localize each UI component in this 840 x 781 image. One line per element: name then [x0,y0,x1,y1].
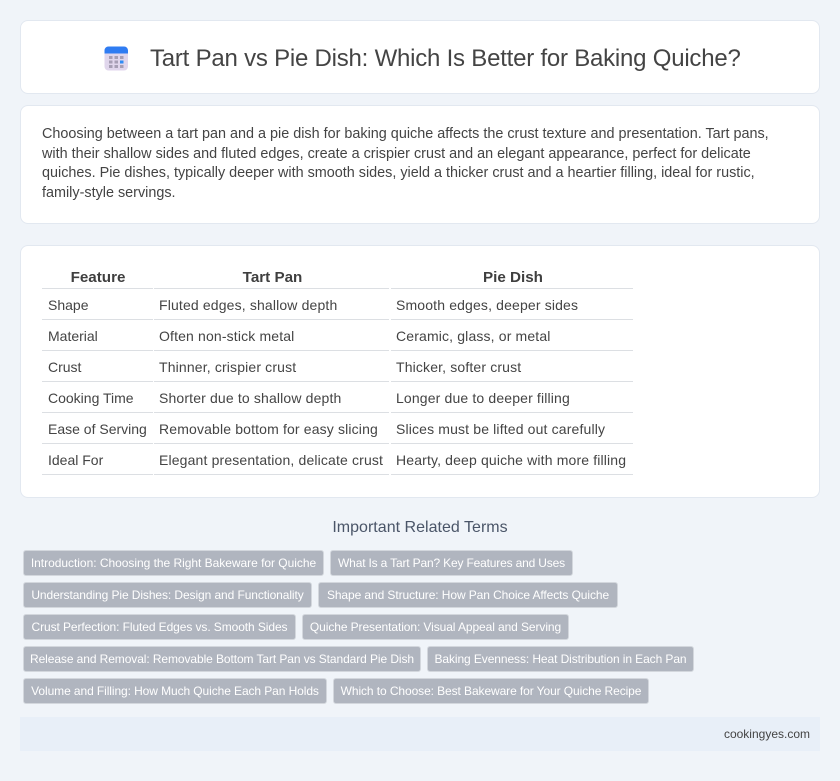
table header [71,269,543,286]
row: shape: Shape [48,297,88,313]
row: cooking time [48,390,570,406]
row: crust: Thicker, softer crust [396,359,521,375]
icon: calendar [104,46,128,70]
row: crust [48,359,522,375]
row: cooking time: Shorter due to shallow depth [159,390,341,406]
intro text: Choosing between a tart pan and a pie dish for baking quiche affects the crust texture and presentation. Tart pans, [42,126,769,142]
row: crust: Thinner, crispier crust [159,359,296,375]
tag: Baking Evenness: Heat Distribution in Each Pan [434,652,686,666]
row: ideal for: Hearty, deep quiche with more filling [396,452,626,468]
tag: Which to Choose: Best Bakeware for Your Quiche Recipe [341,684,641,698]
tag [23,646,421,672]
row: ease of serving [48,421,605,437]
table header: Tart Pan [243,269,302,286]
tag: Crust Perfection: Fluted Edges vs. Smooth Sides [32,620,287,634]
row: material: Ceramic, glass, or metal [396,328,551,344]
panel: comparison table [20,245,820,498]
row: ideal for [48,452,626,468]
intro text [42,126,769,200]
row: shape: Smooth edges, deeper sides [396,297,578,313]
title: Tart Pan vs Pie Dish: Which Is Better for Baking Quiche? [150,45,741,72]
row: material: Material [48,328,98,344]
table header: Pie Dish [483,269,543,286]
tag: Shape and Structure: How Pan Choice Affects Quiche [327,588,609,602]
tag: Volume and Filling: How Much Quiche Each Pan Holds [31,684,319,698]
row: shape: Fluted edges, shallow depth [159,297,337,313]
tag [333,678,649,704]
row: cooking time: Cooking Time [48,390,134,406]
intro text: quiches. Pie dishes, typically deeper with smooth sides, yield a thicker crust and a heartier filling, ideal for rustic, [42,165,755,181]
row: ease of serving: Removable bottom for easy slicing [159,421,378,437]
tag [23,582,312,608]
panel: introduction [20,105,820,224]
row: cooking time: Longer due to deeper filling [396,390,570,406]
tag [330,550,573,576]
intro text: with their shallow sides and fluted edges, create a crispier crust and an elegant appearance, perfect for delicate [42,146,751,162]
tag [427,646,694,672]
table header: Feature [71,269,125,286]
row: ease of serving: Slices must be lifted out carefully [396,421,605,437]
table [42,269,633,475]
row: material [48,328,551,344]
tag [23,614,296,640]
tag: Quiche Presentation: Visual Appeal and Serving [310,620,561,634]
row: ideal for: Elegant presentation, delicate crust [159,452,383,468]
tag [23,678,327,704]
tag: Release and Removal: Removable Bottom Tart Pan vs Standard Pie Dish [30,652,414,666]
source text: cookingyes.com [724,727,810,741]
related terms tags [23,550,694,704]
tag [302,614,569,640]
row: shape [48,297,578,313]
intro text: family-style servings. [42,184,176,200]
row: ease of serving: Ease of Serving [48,421,147,437]
tag: Introduction: Choosing the Right Bakeware for Quiche [31,556,316,570]
tag [318,582,618,608]
tag: What Is a Tart Pan? Key Features and Uses [338,556,565,570]
tag: Understanding Pie Dishes: Design and Functionality [31,588,304,602]
footer [20,717,820,751]
tag [23,550,324,576]
panel: header [20,20,820,94]
row: material: Often non-stick metal [159,328,294,344]
heading: related terms: Important Related Terms [332,519,508,536]
row: ideal for: Ideal For [48,452,103,468]
row: crust: Crust [48,359,81,375]
